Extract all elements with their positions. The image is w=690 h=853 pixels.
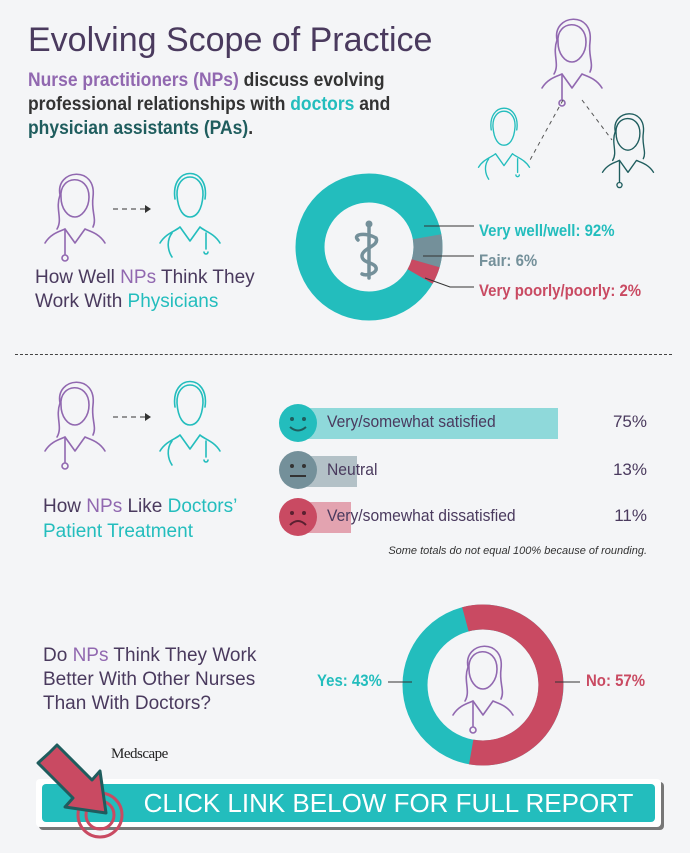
donut legend	[479, 221, 641, 300]
heading: section 1	[35, 267, 255, 312]
donut legend: Very well/well: 92%	[479, 221, 615, 240]
icon: nurse in donut	[453, 646, 513, 733]
icon: top-right trio of nurse, doctor and PA	[478, 19, 654, 188]
donut legend: Very poorly/poorly: 2%	[479, 281, 641, 300]
CTA button	[36, 779, 661, 827]
bar chart: satisfaction	[279, 404, 647, 536]
icon: nurse to doctor (section 2)	[44, 380, 221, 470]
bar chart: satisfaction: Very/somewhat dissatisfied	[327, 506, 516, 525]
icon: smiley faces	[279, 404, 317, 536]
label: yes: Yes: 43%	[317, 671, 382, 690]
heading: section 2: Patient Treatment	[43, 521, 193, 542]
bar chart: satisfaction: 11%	[614, 506, 647, 525]
heading: section 1: How Well NPs Think They	[35, 267, 255, 288]
heading: section 1: Work With Physicians	[35, 291, 218, 312]
donut legend: Fair: 6%	[479, 251, 537, 270]
icon: nurse to doctor (section 1)	[45, 174, 220, 261]
heading: section 2: How NPs Like Doctors’	[43, 496, 237, 517]
icon: cursor arrow	[36, 743, 124, 838]
donut chart: work with physicians	[310, 188, 474, 306]
subtitle: professional relationships with doctors and	[28, 94, 390, 115]
label: no: No: 57%	[586, 671, 645, 690]
bar chart: satisfaction: Very/somewhat satisfied	[327, 412, 496, 431]
heading: section 3	[43, 645, 256, 714]
bar: satisfied	[298, 408, 558, 439]
subtitle: physician assistants (PAs).	[28, 118, 253, 139]
heading: section 3: Better With Other Nurses	[43, 669, 255, 690]
bar chart: satisfaction: Neutral	[327, 460, 377, 479]
logo: Medscape: Medscape	[111, 746, 168, 762]
divider	[15, 354, 672, 355]
icon: caduceus	[357, 220, 377, 278]
bar chart: satisfaction: 13%	[613, 460, 647, 479]
footnote: Some totals do not equal 100% because of rounding.	[388, 545, 647, 557]
subtitle	[28, 70, 390, 139]
title: Evolving Scope of Practice	[28, 21, 432, 59]
heading: section 3: Than With Doctors?	[43, 693, 211, 714]
heading: section 3: Do NPs Think They Work	[43, 645, 256, 666]
heading: section 2	[43, 496, 237, 542]
subtitle: Nurse practitioners (NPs) discuss evolving	[28, 70, 385, 91]
donut chart: nurses vs doctors	[388, 604, 580, 766]
bar: dissatisfied	[298, 502, 351, 533]
CTA button: CLICK LINK BELOW FOR FULL REPORT	[144, 788, 633, 818]
bar chart: satisfaction: 75%	[613, 412, 647, 431]
bar: neutral	[298, 456, 357, 487]
